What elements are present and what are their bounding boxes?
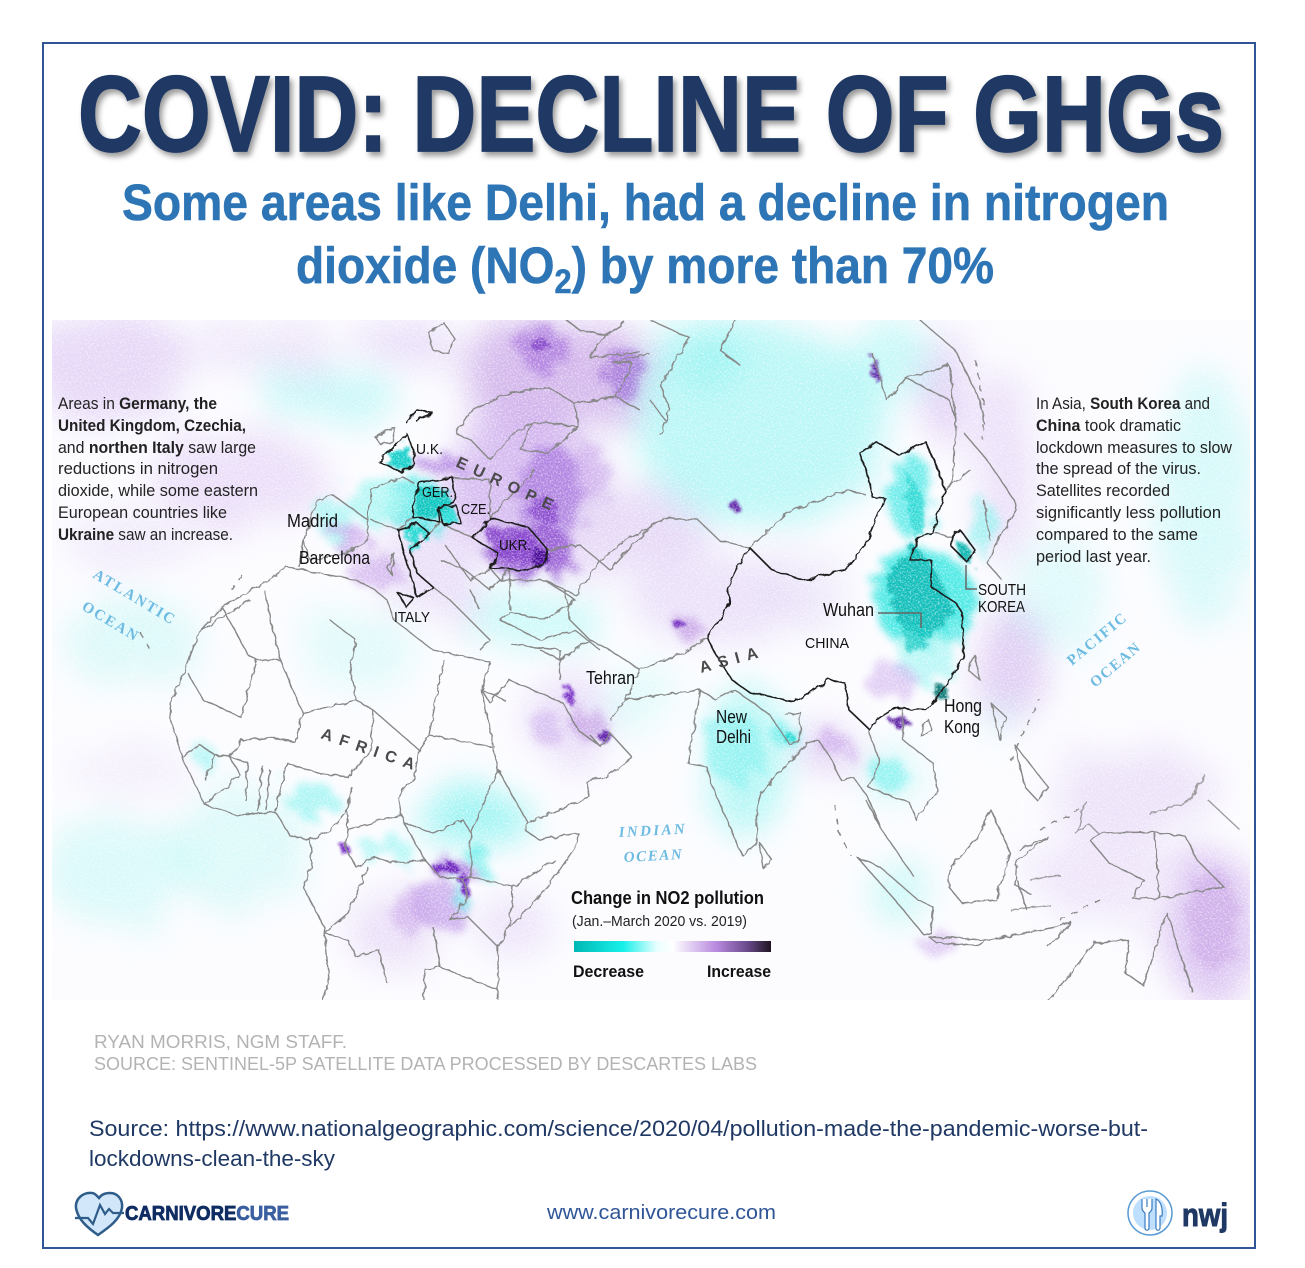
map credit: SOURCE: SENTINEL-5P SATELLITE DATA PROCESSED BY DESCARTES LABS — [94, 1054, 757, 1074]
legend — [571, 888, 771, 981]
place labels: ITALY — [394, 609, 430, 626]
place labels: UKR. — [499, 537, 531, 554]
Africa and Arabia outlines — [170, 567, 632, 1000]
callout: Asia text: lockdown measures to slow — [1036, 438, 1233, 457]
concentrated change zones — [195, 328, 1240, 970]
logo: nwj: nwj — [1182, 1197, 1228, 1233]
source link text: lockdowns-clean-the-sky — [89, 1146, 335, 1171]
legend: Change in NO2 pollution — [571, 888, 764, 908]
place labels: New — [716, 707, 748, 727]
place labels: CHINA — [805, 635, 849, 652]
place labels: CZE. — [461, 501, 490, 518]
place labels: Barcelona — [299, 548, 371, 568]
callout: Asia text: Satellites recorded — [1036, 481, 1170, 500]
logo: Carnivore Cure: CARNIVORECURE — [125, 1203, 289, 1225]
subtitle: ) by more than 70% — [572, 237, 994, 294]
ocean names: INDIAN — [617, 822, 686, 841]
country outlines — [140, 320, 1240, 1000]
dashed island chains — [140, 360, 1100, 920]
place labels: Hong — [944, 696, 982, 716]
region names: AFRICA — [319, 726, 417, 774]
place labels: Tehran — [586, 668, 635, 688]
callout: Asia text: In Asia, South Korea and — [1036, 394, 1210, 413]
source link text — [89, 1116, 1148, 1171]
ocean names: PACIFIC — [1064, 611, 1130, 669]
ocean names: OCEAN — [79, 599, 140, 644]
subtitle: 2 — [555, 263, 572, 301]
place labels: Kong — [944, 717, 980, 737]
callout: Asia text — [1036, 394, 1233, 566]
callout: Europe text: and northen Italy saw large — [58, 438, 256, 457]
ocean names: OCEAN — [1087, 640, 1144, 691]
region names: ASIA — [698, 645, 760, 677]
map base — [52, 320, 1250, 1000]
callout: Asia text: compared to the same — [1036, 525, 1198, 544]
ocean names: ATLANTIC — [90, 567, 177, 628]
logo: nwj — [1128, 1191, 1228, 1235]
map credit: RYAN MORRIS, NGM STAFF. — [94, 1032, 347, 1052]
Asia outlines — [590, 320, 1240, 1000]
place labels: SOUTH — [978, 582, 1026, 599]
place labels: Delhi — [716, 727, 751, 747]
legend: Increase — [707, 962, 771, 981]
place labels: Wuhan — [823, 600, 874, 620]
subtitle: Some areas like Delhi, had a decline in nitrogen — [122, 174, 1169, 231]
place labels: GER. — [422, 484, 453, 501]
callout: Asia text: China took dramatic — [1036, 416, 1181, 435]
fine grain texture — [52, 320, 1250, 1000]
ocean names: OCEAN — [623, 847, 683, 866]
callout: Asia text: period last year. — [1036, 547, 1151, 566]
subtitle: dioxide (NO — [296, 237, 582, 294]
callout: Asia text: significantly less pollution — [1036, 503, 1221, 522]
place labels: U.K. — [416, 441, 443, 458]
Europe outlines — [299, 320, 650, 680]
icon: heart with heartbeat — [75, 1193, 124, 1235]
website address: www.carnivorecure.com — [546, 1202, 776, 1224]
source link text: Source: https://www.nationalgeographic.com/science/2020/04/pollution-made-the-pandemic-worse-but- — [89, 1116, 1148, 1141]
callout: Europe text: Ukraine saw an increase. — [58, 525, 233, 544]
subtitle — [122, 174, 1169, 301]
icon: fork and knife — [1128, 1191, 1172, 1235]
leader lines — [878, 565, 977, 628]
legend: Decrease — [573, 962, 644, 981]
place labels — [287, 441, 1026, 747]
callout: Asia text: the spread of the virus. — [1036, 459, 1201, 478]
callout: Europe text: European countries like — [58, 503, 227, 522]
hotspots and core reductions — [340, 339, 972, 895]
callout: Europe text: United Kingdom, Czechia, — [58, 416, 246, 435]
region names: EUROPE — [453, 454, 556, 514]
callout: Europe text: dioxide, while some eastern — [58, 481, 258, 500]
broad pollution washes — [25, 310, 1265, 1005]
ocean names — [79, 567, 1144, 866]
callout: Europe text — [58, 394, 258, 544]
callout: Europe text: reductions in nitrogen — [58, 459, 218, 478]
highlighted borders — [379, 410, 975, 730]
place labels: Madrid — [287, 511, 338, 531]
legend: (Jan.–March 2020 vs. 2019) — [572, 913, 747, 930]
place labels: KOREA — [978, 599, 1025, 616]
map: NO2 change over Eurasia and Africa — [25, 310, 1265, 1005]
map credit — [94, 1032, 757, 1074]
region names — [319, 454, 760, 774]
callout: Europe text: Areas in Germany, the — [58, 394, 217, 413]
logo: Carnivore Cure — [75, 1193, 289, 1235]
